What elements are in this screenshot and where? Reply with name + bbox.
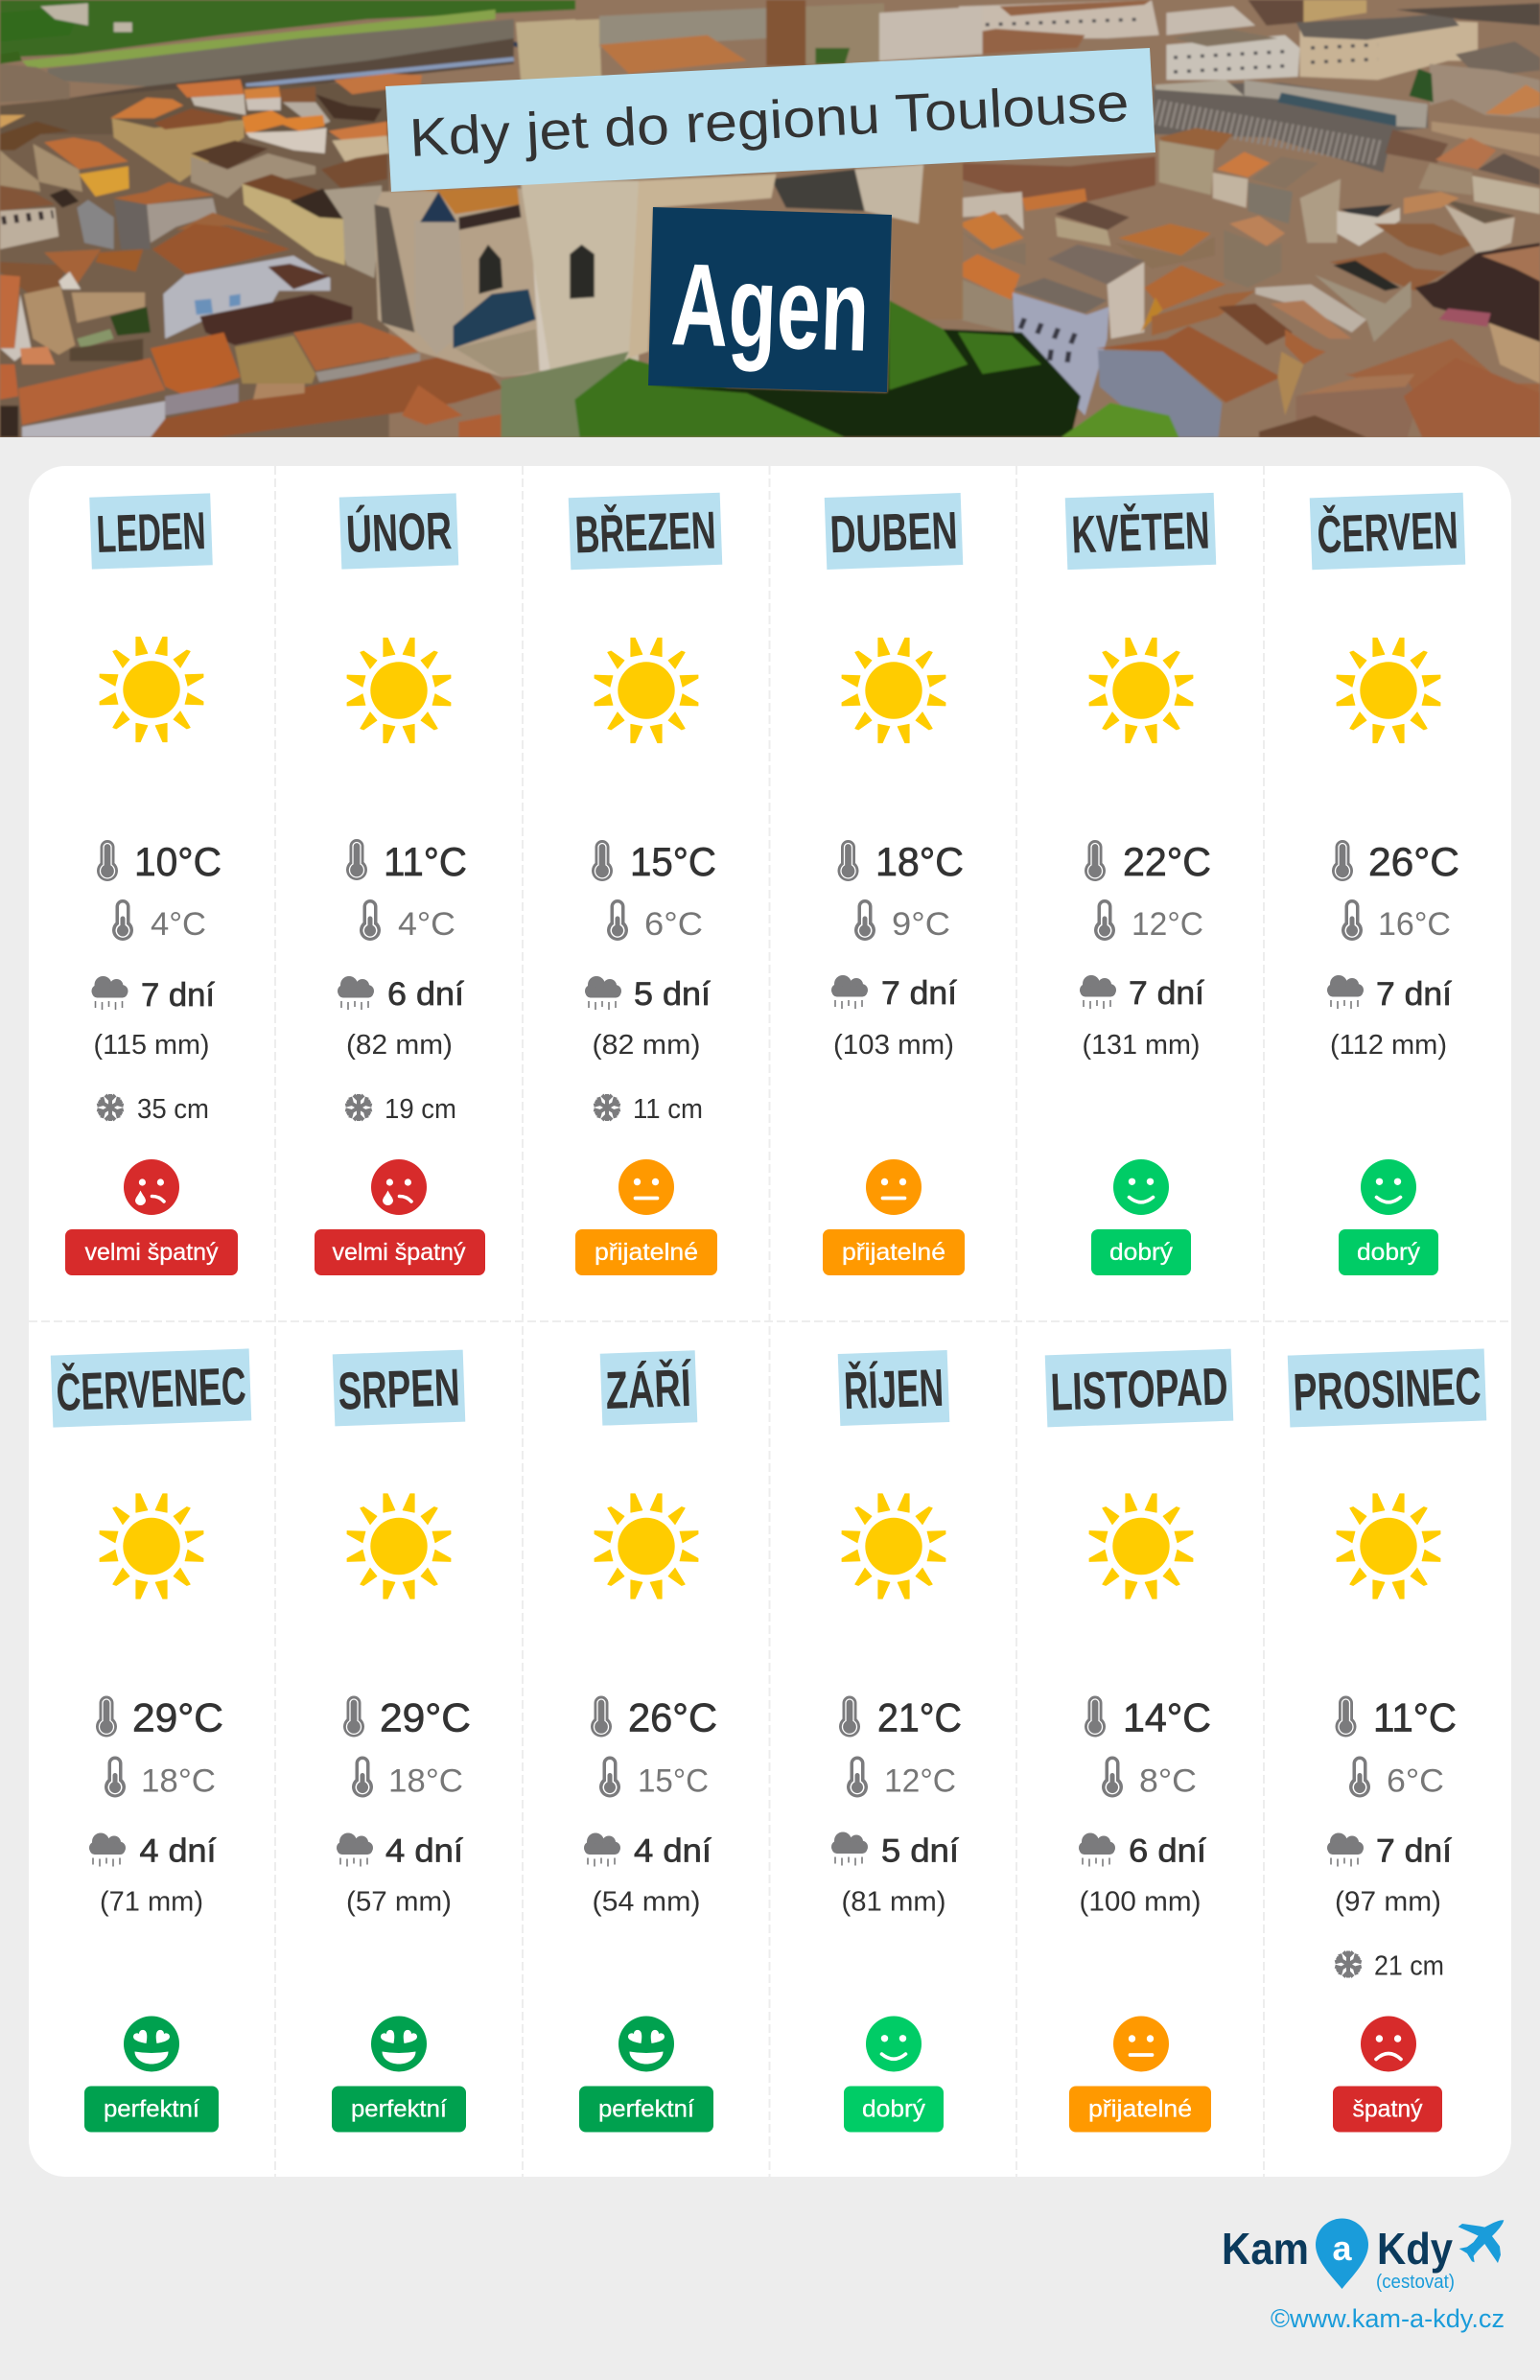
card: BŘEZEN (569, 493, 722, 1275)
icon: sun (347, 638, 451, 743)
month label (569, 493, 722, 570)
high temperature: 11°C (384, 839, 467, 884)
rating badge: dobrý (1109, 1239, 1174, 1266)
icon: happy face (866, 2016, 922, 2071)
icon: rain cloud (1327, 1833, 1364, 1866)
icon: thermometer high (96, 1695, 117, 1738)
high temperature: 18°C (875, 839, 964, 884)
icon: sun (347, 1494, 451, 1598)
icon: in-love face (371, 2016, 427, 2071)
rating badge: perfektní (351, 2096, 447, 2123)
icon: rain cloud (1080, 975, 1116, 1009)
icon: thermometer low (607, 899, 628, 941)
low temperature: 8°C (1139, 1762, 1197, 1799)
high temperature: 21°C (877, 1695, 962, 1739)
icon: crying face (371, 1159, 427, 1215)
icon: thermometer low (599, 1757, 620, 1798)
rainy days: 6 dní (1129, 1833, 1207, 1870)
rainy days: 5 dní (634, 976, 712, 1013)
icon: rain cloud (1079, 1833, 1115, 1866)
month label (339, 493, 458, 570)
low temperature: 12°C (884, 1762, 956, 1799)
month label: ÚNOR (345, 501, 453, 564)
icon: thermometer high (97, 840, 118, 881)
icon: thermometer high (1332, 840, 1353, 881)
card: ČERVENEC (51, 1348, 251, 2133)
month label (1288, 1348, 1486, 1428)
rainy days: 7 dní (141, 977, 216, 1014)
precipitation: (112 mm) (1330, 1030, 1447, 1061)
icon: in-love face (618, 2016, 674, 2071)
month label: SRPEN (337, 1357, 461, 1421)
icon: map pin with a (1316, 2219, 1368, 2289)
high temperature: 26°C (628, 1695, 717, 1739)
icon: sad face (1361, 2016, 1416, 2071)
icon: thermometer low (1102, 1757, 1123, 1798)
month label: LEDEN (95, 501, 207, 564)
icon: neutral face (866, 1159, 922, 1215)
icon: thermometer high (1335, 1695, 1356, 1738)
precipitation: (82 mm) (346, 1030, 453, 1061)
icon: crying face (124, 1159, 179, 1215)
icon: thermometer low (1094, 899, 1115, 941)
icon: sun (100, 637, 203, 742)
month label (51, 1348, 251, 1428)
card: ZÁŘÍ (579, 1350, 717, 2133)
icon: thermometer high (592, 840, 613, 881)
precipitation: (82 mm) (593, 1030, 700, 1061)
high temperature: 15°C (630, 839, 716, 884)
rating badge: přijatelné (1088, 2096, 1192, 2123)
card: ŘÍJEN (831, 1350, 962, 2133)
calendar panel (29, 466, 1511, 2177)
rainy days: 4 dní (385, 1833, 464, 1870)
rating badge (575, 1229, 717, 1275)
icon: snowflake (96, 1094, 125, 1121)
icon: neutral face (618, 1159, 674, 1215)
rainy days: 6 dní (387, 976, 465, 1013)
icon: thermometer low (360, 899, 381, 941)
icon: sun (100, 1494, 203, 1598)
month label (1045, 1349, 1233, 1427)
precipitation: (81 mm) (842, 1887, 945, 1918)
icon: rain cloud (1327, 975, 1364, 1009)
precipitation: (100 mm) (1080, 1887, 1201, 1918)
icon: rain cloud (89, 1833, 126, 1866)
icon: thermometer low (847, 1757, 868, 1798)
month label: LISTOPAD (1050, 1356, 1229, 1422)
month label: ČERVENEC (56, 1356, 247, 1422)
rating badge: perfektní (598, 2096, 694, 2123)
month label: BŘEZEN (573, 500, 717, 565)
rating badge (579, 2087, 713, 2133)
low temperature: 16°C (1378, 906, 1451, 943)
low temperature: 18°C (141, 1762, 216, 1799)
website credit: ©www.kam-a-kdy.cz (1271, 2304, 1505, 2333)
icon: map pin with a: a (1332, 2228, 1352, 2268)
precipitation: (57 mm) (346, 1887, 452, 1918)
icon: rain cloud (831, 975, 868, 1009)
icon: thermometer high (346, 839, 367, 880)
card: ÚNOR (315, 493, 485, 1275)
high temperature: 11°C (1373, 1695, 1457, 1739)
icon: rain cloud (338, 976, 374, 1010)
precipitation: (115 mm) (94, 1030, 209, 1061)
icon: rain cloud (92, 976, 128, 1010)
month label: ZÁŘÍ (604, 1358, 693, 1420)
high temperature: 10°C (134, 839, 222, 884)
logo word Kam: Kam (1222, 2224, 1309, 2274)
city name banner: Agen (669, 239, 872, 376)
icon: snowflake (593, 1094, 621, 1121)
panel grid dividers (29, 466, 1511, 2177)
icon: thermometer high (838, 840, 859, 881)
icon: sun (1089, 638, 1193, 743)
title banner (385, 48, 1155, 192)
precipitation: (103 mm) (833, 1030, 954, 1061)
month label (89, 493, 213, 570)
low temperature: 4°C (398, 906, 455, 943)
rating badge: dobrý (1357, 1239, 1421, 1266)
month label: KVĚTEN (1070, 501, 1211, 564)
high temperature: 29°C (132, 1695, 223, 1739)
icon: sun (595, 638, 698, 743)
card: KVĚTEN (1065, 493, 1216, 1275)
low temperature: 18°C (388, 1762, 463, 1799)
icon: rain cloud (585, 976, 621, 1010)
logo: Kam a Kdy (1222, 2219, 1504, 2293)
card: SRPEN (332, 1350, 471, 2133)
snow depth: 11 cm (633, 1094, 703, 1125)
icon: sun (842, 1494, 945, 1598)
logo word Kdy: Kdy (1377, 2224, 1453, 2274)
rating badge (84, 2087, 219, 2133)
precipitation: (97 mm) (1335, 1887, 1441, 1918)
low temperature: 15°C (638, 1762, 709, 1799)
icon: sun (1337, 638, 1440, 743)
card: ČERVEN (1310, 493, 1465, 1275)
icon: thermometer low (1342, 899, 1363, 941)
rainy days: 7 dní (1376, 1833, 1453, 1870)
icon: thermometer high (591, 1695, 612, 1738)
snow depth: 21 cm (1374, 1950, 1444, 1981)
title banner: Kdy jet do regionu Toulouse (408, 72, 1131, 168)
month label: ČERVEN (1316, 500, 1459, 565)
rating badge (1069, 2087, 1211, 2133)
precipitation: (131 mm) (1082, 1030, 1201, 1061)
card: PROSINEC (1288, 1348, 1486, 2133)
icon: neutral face (1113, 2016, 1169, 2071)
icon: rain cloud (337, 1833, 373, 1866)
icon: happy face (1361, 1159, 1416, 1215)
high temperature: 22°C (1123, 839, 1211, 884)
rating badge: špatný (1352, 2096, 1423, 2123)
rainy days: 7 dní (881, 975, 958, 1012)
card: LEDEN (65, 493, 238, 1275)
icon: thermometer high (1085, 840, 1106, 881)
month label (333, 1350, 465, 1426)
month label: ŘÍJEN (843, 1358, 945, 1420)
icon: sun (1337, 1494, 1440, 1598)
icon: thermometer high (839, 1695, 860, 1738)
icon: sun (595, 1494, 698, 1598)
low temperature: 9°C (892, 906, 950, 943)
rating badge: velmi špatný (84, 1239, 219, 1266)
icon: thermometer low (352, 1757, 373, 1798)
rainy days: 4 dní (634, 1833, 712, 1870)
hero photo of Agen rooftops (0, 0, 1540, 456)
high temperature: 14°C (1123, 1695, 1211, 1739)
high temperature: 29°C (380, 1695, 471, 1739)
icon: airplane (1458, 2220, 1504, 2263)
rating badge (1339, 1229, 1438, 1275)
rating badge: přijatelné (595, 1239, 698, 1266)
precipitation: (71 mm) (100, 1887, 203, 1918)
card: DUBEN (823, 493, 965, 1275)
icon: snowflake (1334, 1950, 1363, 1977)
icon: thermometer low (112, 899, 133, 941)
low temperature: 4°C (151, 906, 206, 943)
rating badge: perfektní (104, 2096, 199, 2123)
rating badge (1333, 2087, 1442, 2133)
rating badge: přijatelné (842, 1239, 945, 1266)
card: LISTOPAD (1045, 1349, 1233, 2133)
icon: snowflake (344, 1094, 373, 1121)
rainy days: 7 dní (1129, 975, 1205, 1012)
icon: thermometer high (1085, 1695, 1106, 1738)
rating badge (315, 1229, 485, 1275)
low temperature: 6°C (1387, 1762, 1444, 1799)
snow depth: 19 cm (385, 1094, 456, 1125)
icon: thermometer low (105, 1757, 126, 1798)
icon: sun (1089, 1494, 1193, 1598)
month label (838, 1350, 949, 1426)
icon: thermometer low (854, 899, 875, 941)
icon: happy face (1113, 1159, 1169, 1215)
rating badge (1091, 1229, 1191, 1275)
low temperature: 12°C (1132, 906, 1203, 943)
icon: rain cloud (831, 1832, 868, 1866)
icon: in-love face (124, 2016, 179, 2071)
city name banner (648, 207, 892, 392)
icon: sun (842, 638, 945, 743)
rating badge: velmi špatný (332, 1239, 466, 1266)
rating badge (332, 2087, 466, 2133)
month label: DUBEN (828, 501, 959, 564)
high temperature: 26°C (1368, 839, 1459, 884)
month label (1310, 493, 1465, 570)
rainy days: 7 dní (1376, 976, 1453, 1013)
rating badge (823, 1229, 965, 1275)
month label (1065, 493, 1216, 570)
precipitation: (54 mm) (593, 1887, 700, 1918)
rating badge: dobrý (862, 2096, 926, 2123)
icon: thermometer low (1349, 1757, 1370, 1798)
snow depth: 35 cm (137, 1094, 209, 1125)
icon: rain cloud (584, 1833, 620, 1866)
month label (825, 493, 963, 570)
low temperature: 6°C (644, 906, 703, 943)
rating badge (844, 2087, 944, 2133)
rating badge (65, 1229, 238, 1275)
month label (600, 1350, 697, 1426)
rainy days: 4 dní (140, 1833, 217, 1870)
rainy days: 5 dní (881, 1833, 960, 1870)
icon: thermometer high (343, 1695, 364, 1738)
logo subtitle: (cestovat) (1376, 2272, 1455, 2293)
